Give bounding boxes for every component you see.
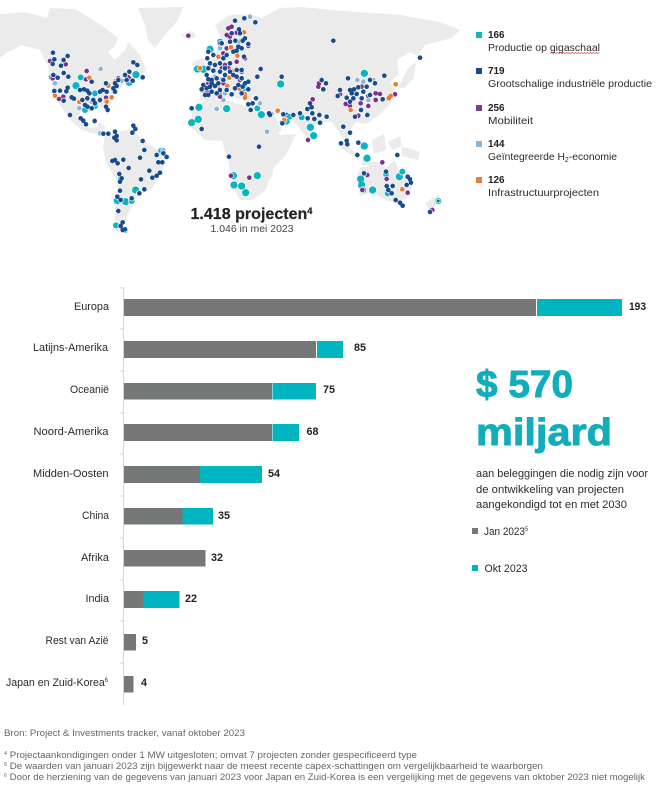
- bar: Oceanië: Oceanië: [70, 384, 109, 396]
- bar: India: India: [86, 593, 110, 605]
- footnotes: 6: [4, 773, 7, 779]
- footnotes: Door de herziening van de gegevens van januari 2023 voor Japan en Zuid-Korea is een vergelijking met de gegevens van oktober 2023 niet mogelijk: [7, 772, 646, 782]
- bar: India: [86, 591, 197, 608]
- world map of projects: [0, 7, 460, 232]
- bar: China: China: [82, 510, 110, 522]
- bar: Afrika: Afrika: [81, 552, 110, 564]
- legend item: large-scale industrial production: [476, 65, 652, 90]
- bar: Japan en Zuid-Korea: [6, 676, 148, 692]
- footnotes: 5: [4, 762, 7, 768]
- bar: Midden-Oosten: 54: [268, 468, 281, 480]
- legend item: integrated H2 economy: Geïntegreerde H: [488, 151, 566, 163]
- legend: Jan 2023: 5: [525, 527, 529, 533]
- legend item: integrated H2 economy: 144: [488, 138, 505, 150]
- legend item: gigascale production: 166: [488, 29, 505, 41]
- legend item: mobility: [476, 102, 533, 127]
- legend item: mobility: 256: [488, 102, 505, 114]
- legend item: gigascale production: Productie op gigaschaal: [488, 42, 600, 54]
- callout description: [476, 468, 648, 511]
- big figure unit: miljard: [476, 412, 612, 454]
- legend item: integrated H2 economy: -economie: [569, 151, 617, 163]
- bar: Midden-Oosten: Midden-Oosten: [33, 468, 108, 480]
- bar: Oceanië: [70, 383, 335, 400]
- map comparison subheading: 1.046 in mei 2023: [210, 223, 294, 235]
- bar: Latijns-Amerika: Latijns-Amerika: [33, 342, 109, 354]
- chart legend: [472, 526, 529, 575]
- map: project dots west: [50, 36, 234, 230]
- bar: Europa: [74, 299, 646, 316]
- bar: Rest van Azië: [46, 634, 148, 650]
- map: project dots east: [231, 41, 438, 212]
- bar: Europa: Europa: [74, 301, 110, 313]
- bar: Midden-Oosten: [33, 466, 281, 483]
- source line: Bron: Project & Investments tracker, vanaf oktober 2023: [4, 728, 245, 738]
- bar: India: 22: [185, 593, 197, 605]
- legend: Okt 2023: Okt 2023: [484, 563, 528, 575]
- legend item: integrated H2 economy: 2: [565, 157, 569, 164]
- chart axis: [120, 287, 124, 705]
- legend: project types: [476, 29, 652, 199]
- callout description: aangekondigd tot en met 2030: [476, 499, 627, 511]
- footnotes: [4, 750, 646, 782]
- legend item: infrastructure: Infrastructuurprojecten: [488, 187, 599, 199]
- bar: Japan en Zuid-Korea: 6: [105, 678, 109, 684]
- map total heading: 1.418 projecten: [190, 206, 303, 223]
- map: project dots Europe: [192, 17, 290, 123]
- legend item: infrastructure: 126: [488, 174, 505, 186]
- callout description: de ontwikkeling van projecten: [476, 484, 624, 496]
- footnotes: 4: [4, 751, 7, 757]
- legend item: gigascale production: [476, 29, 600, 54]
- bar: Latijns-Amerika: 85: [354, 342, 366, 354]
- map total heading: 4: [307, 206, 312, 216]
- bar: China: 35: [218, 510, 230, 522]
- legend item: large-scale industrial production: 719: [488, 65, 505, 77]
- map: land masses: [0, 7, 460, 232]
- legend item: mobility: Mobiliteit: [488, 115, 533, 127]
- bar: Noord-Amerika: [34, 424, 318, 441]
- bar chart: investments per region: [6, 287, 646, 705]
- bar: Noord-Amerika: Noord-Amerika: [34, 426, 109, 438]
- bar: Afrika: [81, 550, 223, 566]
- legend item: integrated H2 economy: [476, 138, 617, 164]
- callout description: aan beleggingen die nodig zijn voor: [476, 468, 648, 480]
- bar: Japan en Zuid-Korea: Japan en Zuid-Korea: [6, 677, 109, 689]
- bar: Oceanië: 75: [323, 384, 335, 396]
- bar: China: [82, 508, 230, 524]
- bar: Latijns-Amerika: [33, 341, 366, 358]
- legend item: large-scale industrial production: Grootschalige industriële productie: [488, 78, 652, 90]
- big figure: $ 570: [476, 364, 573, 406]
- bar: Europa: 193: [629, 301, 646, 313]
- bar: Noord-Amerika: 68: [306, 426, 318, 438]
- bar: Japan en Zuid-Korea: 4: [141, 677, 148, 689]
- investment callout: [476, 364, 648, 511]
- bar: Rest van Azië: Rest van Azië: [46, 635, 108, 647]
- bar: Afrika: 32: [211, 552, 223, 564]
- legend: Jan 2023: Jan 2023: [484, 526, 529, 538]
- footnotes: De waarden van januari 2023 zijn bijgewerkt naar de meest recente capex-schattingen om vergelijkbaarheid te waarborgen: [7, 761, 543, 771]
- footnotes: Projectaankondigingen onder 1 MW uitgesloten; omvat 7 projecten zonder gespecificeerd type: [7, 750, 417, 760]
- legend item: infrastructure: [476, 174, 599, 199]
- bar: Rest van Azië: 5: [142, 635, 148, 647]
